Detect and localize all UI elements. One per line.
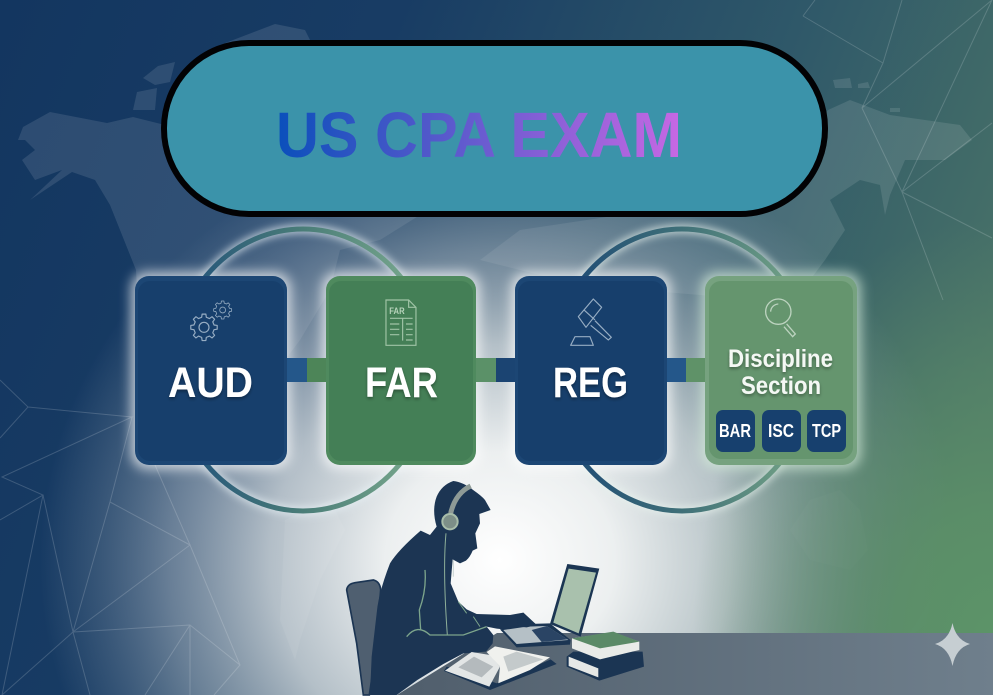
chip: BAR: BAR	[719, 421, 751, 441]
icon: gears	[191, 301, 232, 341]
silhouette	[370, 481, 537, 695]
icon: FAR document: FAR	[389, 306, 405, 316]
panel: REG	[515, 276, 667, 465]
heading: Discipline Section: Section	[741, 372, 821, 400]
connected rings	[173, 229, 812, 511]
book stack	[567, 632, 644, 681]
illustration: student studying at laptop	[347, 481, 537, 695]
chip: TCP	[807, 410, 846, 452]
chip: ISC	[762, 410, 801, 452]
open book	[444, 646, 557, 690]
headphones	[407, 486, 487, 637]
panel: Discipline Section	[705, 276, 857, 465]
glow behind diagram	[131, 229, 861, 511]
title pill	[164, 43, 825, 214]
laptop	[500, 564, 599, 647]
heading: Discipline Section	[728, 345, 833, 400]
panel: FAR	[326, 276, 476, 465]
FAR label: FAR	[365, 359, 438, 407]
AUD label: AUD	[168, 359, 253, 407]
chip: BAR	[716, 410, 755, 452]
panel: AUD	[135, 276, 287, 465]
table	[397, 633, 993, 695]
icon: sparkle	[935, 623, 970, 666]
chip: TCP: TCP	[812, 421, 841, 441]
chip: ISC: ISC	[768, 421, 794, 441]
icon: gavel	[571, 299, 611, 345]
icon: FAR document	[386, 300, 416, 345]
connectors between cards	[287, 358, 706, 382]
title: US CPA EXAM	[276, 99, 682, 171]
heading: Discipline Section: Discipline	[728, 345, 833, 373]
REG label: REG	[553, 359, 628, 407]
chair	[347, 580, 381, 695]
icon: magnifier	[766, 299, 795, 337]
